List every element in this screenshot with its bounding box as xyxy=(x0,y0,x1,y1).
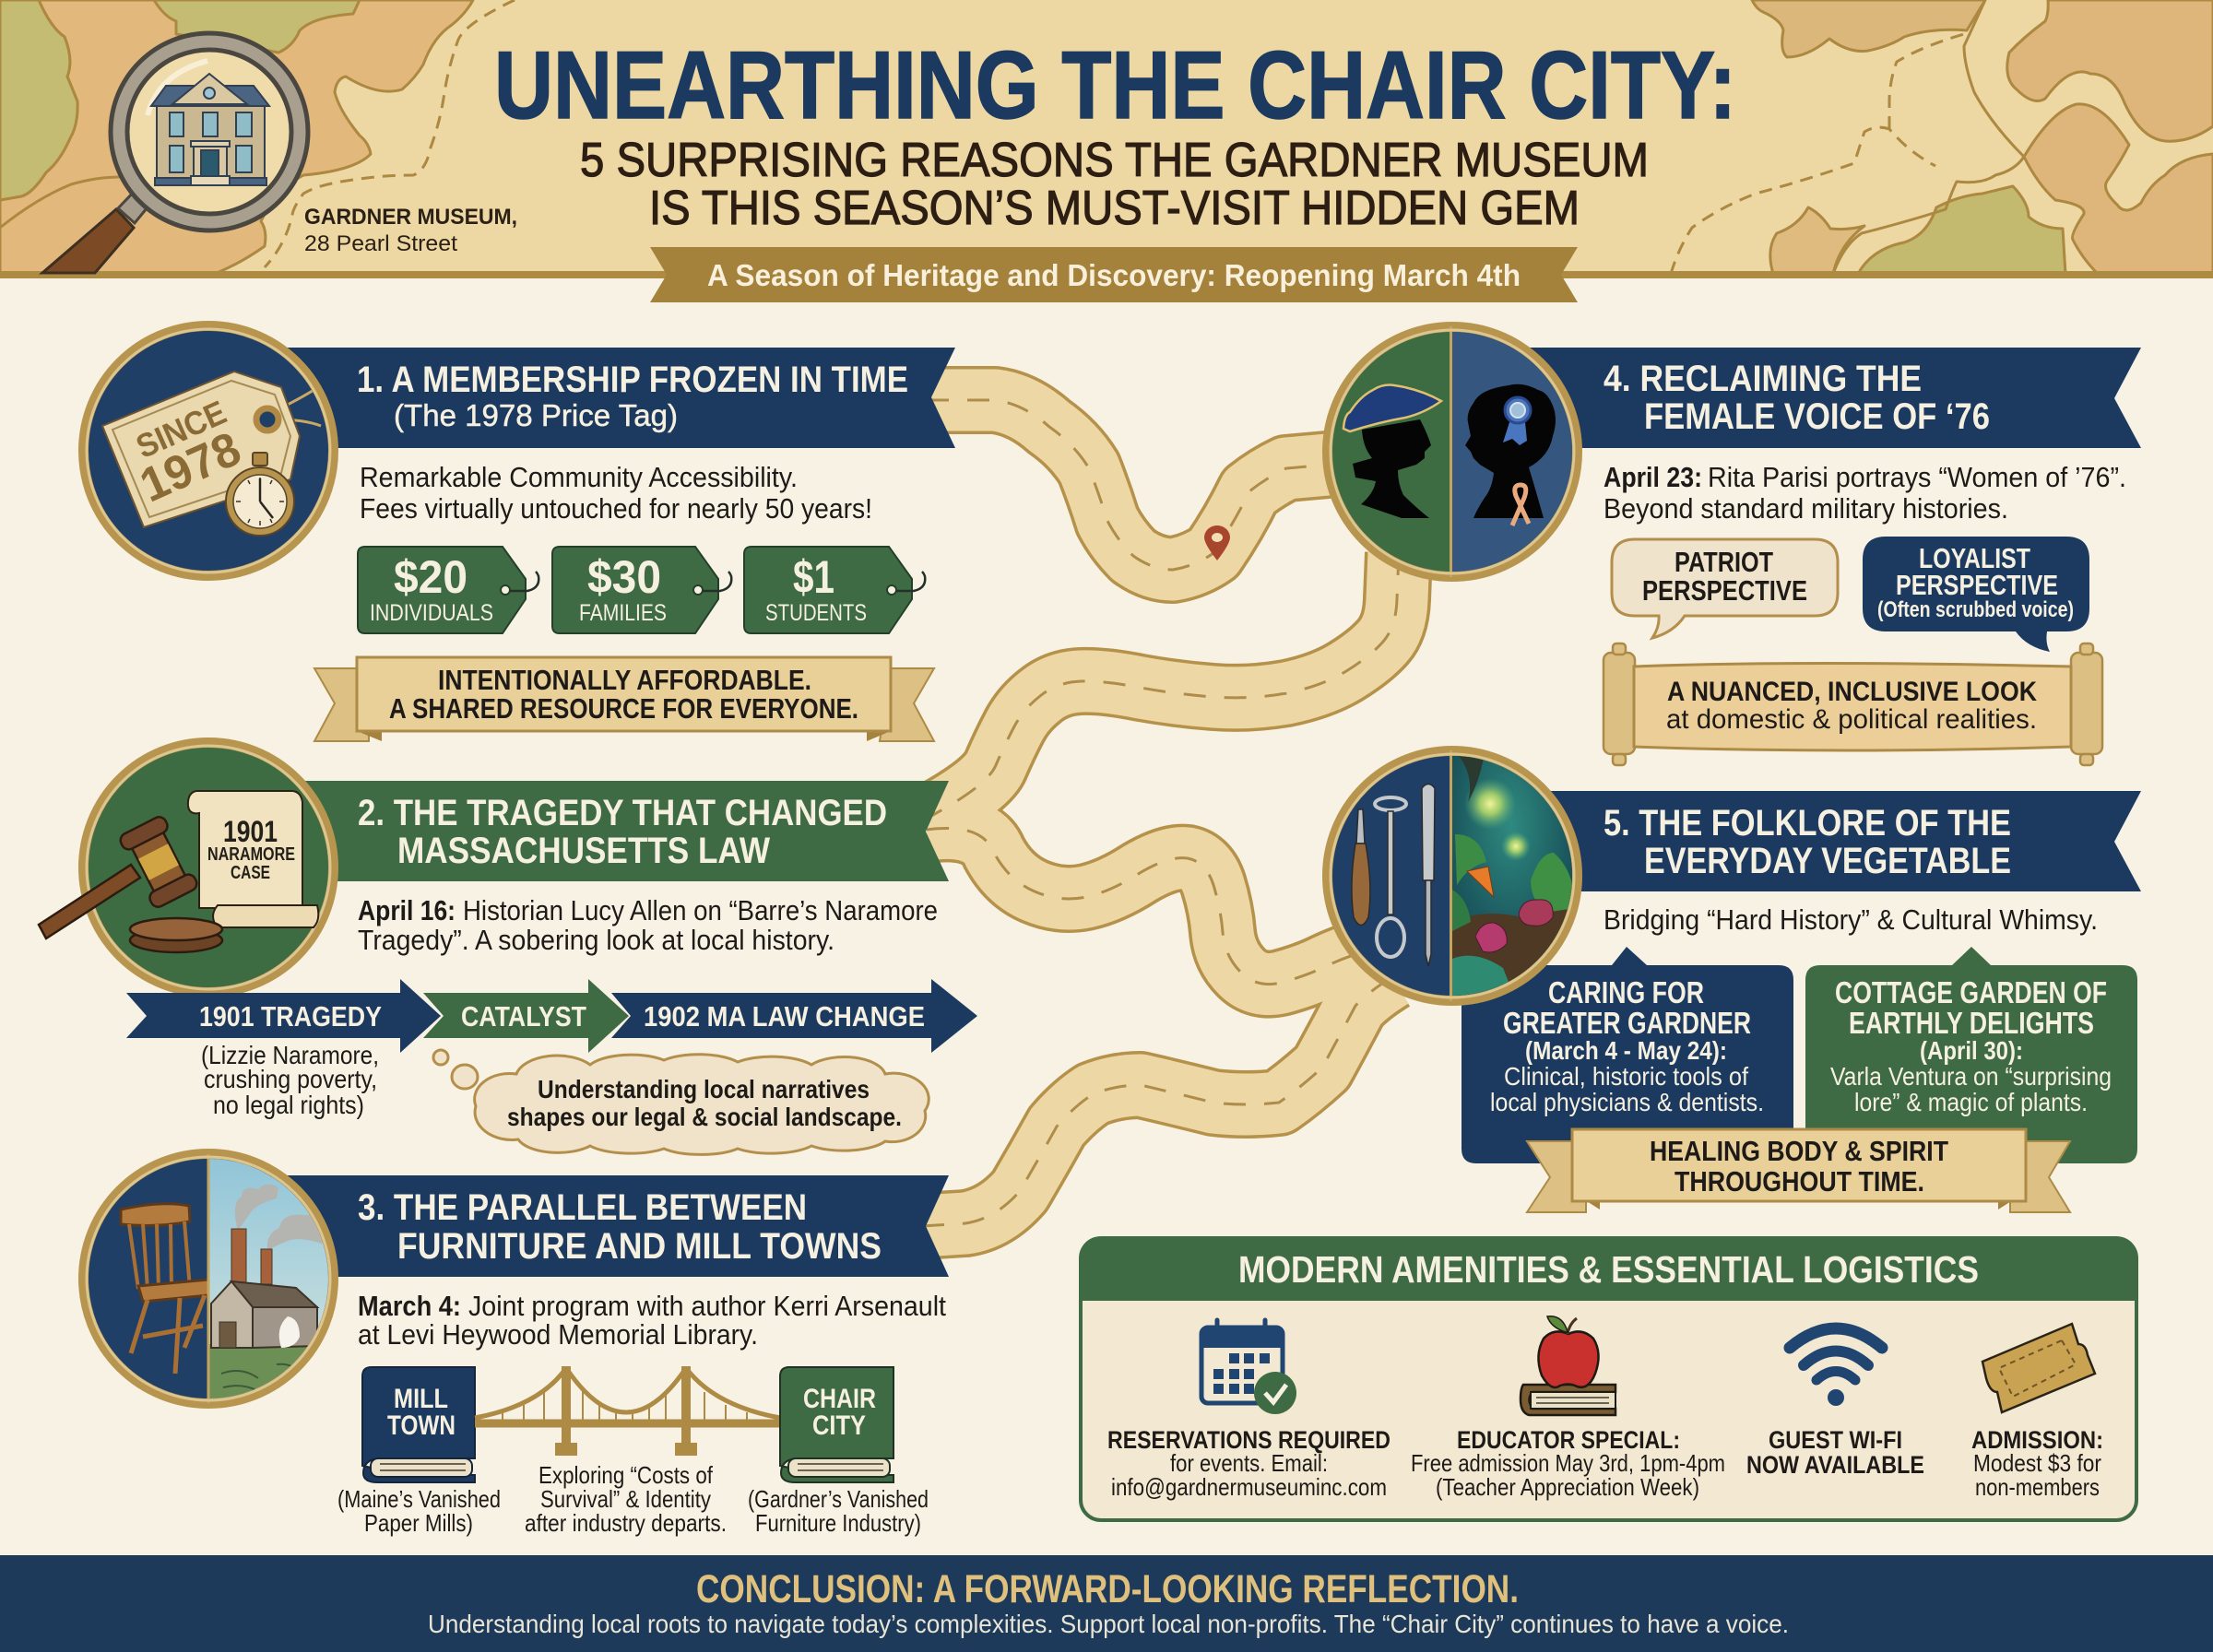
price tag: families xyxy=(552,547,731,633)
speech bubble: loyalist: LOYALIST xyxy=(1919,542,2030,574)
event text: April 23: xyxy=(1604,461,1702,493)
speech bubble: patriot: PERSPECTIVE xyxy=(1642,574,1807,607)
price tag: families: FAMILIES xyxy=(579,600,667,626)
heading banner 1: (The 1978 Price Tag) xyxy=(394,398,678,432)
factory xyxy=(235,1184,278,1231)
bridge captions: (Gardner’s Vanished xyxy=(748,1485,929,1513)
icon: wifi xyxy=(1790,1328,1882,1406)
panel: section 5 folklore xyxy=(1328,747,2141,1212)
bridge captions: Furniture Industry) xyxy=(755,1509,921,1537)
subtitle: 5 SURPRISING REASONS THE GARDNER MUSEUM xyxy=(580,134,1649,187)
bridge captions: after industry departs. xyxy=(525,1509,727,1537)
medallion: chair and mill xyxy=(83,1152,337,1410)
wifi text xyxy=(1746,1426,1924,1479)
educator text: EDUCATOR SPECIAL: xyxy=(1457,1426,1680,1454)
event text: March 4: xyxy=(358,1290,461,1322)
amenities header: MODERN AMENITIES & ESSENTIAL LOGISTICS xyxy=(1238,1248,1979,1291)
price tag: individuals xyxy=(358,547,538,633)
bridge captions: Paper Mills) xyxy=(364,1509,473,1537)
price tag: students: $1 xyxy=(793,551,834,603)
icon: ticket xyxy=(1982,1324,2095,1412)
icon: book mill town xyxy=(362,1367,475,1482)
subtitle xyxy=(580,134,1649,235)
heading banner 2: 2. THE TRAGEDY THAT CHANGED xyxy=(358,793,887,833)
ribbon banner: healing body and spirit: HEALING BODY & SPIRIT xyxy=(1650,1135,1948,1167)
ribbon banner: healing body and spirit xyxy=(1527,1129,2070,1212)
scroll: nuanced look: at domestic & political realities. xyxy=(1666,704,2037,735)
medallion: medical tools and garden xyxy=(1328,747,1584,1005)
event text: Historian Lucy Allen on “Barre’s Naramore xyxy=(463,894,938,926)
price tag: individuals: INDIVIDUALS xyxy=(370,600,493,626)
intro text: Bridging “Hard History” & Cultural Whimsy. xyxy=(1604,903,2098,936)
educator text: (Teacher Appreciation Week) xyxy=(1436,1473,1699,1501)
ribbon banner: intentionally affordable xyxy=(314,657,934,741)
heading banner 4: FEMALE VOICE OF ‘76 xyxy=(1644,396,1990,437)
card: caring for greater gardner: Clinical, historic tools of xyxy=(1504,1062,1748,1091)
card: cottage garden: Varla Ventura on “surprising xyxy=(1830,1062,2112,1091)
card: cottage garden: lore” & magic of plants. xyxy=(1854,1088,2088,1116)
event text: Beyond standard military histories. xyxy=(1604,492,2008,525)
wifi text: GUEST WI-FI xyxy=(1769,1426,1902,1454)
thought bubble: shapes our legal & social landscape. xyxy=(507,1103,902,1131)
medallion: gavel and scroll xyxy=(39,743,334,992)
event text: Rita Parisi portrays “Women of ’76”. xyxy=(1708,461,2126,493)
price tag: individuals: $20 xyxy=(394,551,467,603)
heading banner 5: EVERYDAY VEGETABLE xyxy=(1644,841,2011,881)
speech bubble: loyalist: PERSPECTIVE xyxy=(1896,569,2058,601)
heading banner 2: MASSACHUSETTS LAW xyxy=(397,831,770,871)
heading banner 1: 1. A MEMBERSHIP FROZEN IN TIME xyxy=(357,360,908,400)
medallion: patriot and loyalist silhouettes xyxy=(1328,323,1584,581)
arrow: catalyst xyxy=(423,979,629,1053)
arrow: 1901 tragedy: 1901 TRAGEDY xyxy=(199,1000,382,1032)
icon: magnifying glass with museum xyxy=(42,33,308,273)
event text xyxy=(1604,461,2126,525)
bridge captions: (Maine’s Vanished xyxy=(337,1485,501,1513)
heading banner 2 xyxy=(277,781,949,881)
patriot silhouette xyxy=(1353,419,1431,518)
admission text: Modest $3 for xyxy=(1973,1449,2101,1477)
panel: section 1 membership xyxy=(83,326,955,741)
heading banner 4 xyxy=(1512,348,2141,448)
intro text: Fees virtually untouched for nearly 50 years! xyxy=(360,492,872,525)
admission text: non-members xyxy=(1975,1473,2100,1501)
bridge captions: Exploring “Costs of xyxy=(538,1461,714,1489)
admission text xyxy=(1971,1426,2103,1501)
icon: book chair city xyxy=(780,1367,893,1482)
event text: April 16: xyxy=(358,894,456,926)
event text xyxy=(358,894,938,956)
reservations text: for events. Email: xyxy=(1170,1449,1328,1477)
heading banner 4: 4. RECLAIMING THE xyxy=(1604,359,1922,399)
card: caring for greater gardner: local physicians & dentists. xyxy=(1490,1088,1764,1116)
intro text: Remarkable Community Accessibility. xyxy=(360,461,798,493)
icon: book chair city: CHAIR xyxy=(803,1384,876,1414)
panel: section 3 parallel xyxy=(83,1152,949,1537)
card: caring for greater gardner: GREATER GARDNER xyxy=(1503,1006,1751,1040)
magnifier handle xyxy=(42,209,134,273)
museum name and address: GARDNER MUSEUM, xyxy=(304,205,517,230)
museum name and address xyxy=(304,205,517,256)
scroll xyxy=(188,791,318,927)
reservations text xyxy=(1107,1426,1391,1501)
icon: book chair city: CITY xyxy=(812,1410,866,1441)
winding road connecting sections xyxy=(922,400,1399,1226)
arrow caption: (Lizzie Naramore, xyxy=(201,1041,379,1069)
icon: map pin xyxy=(1204,525,1230,560)
arrow caption xyxy=(201,1041,379,1119)
awareness ribbon xyxy=(1512,485,1529,525)
header ribbon xyxy=(650,247,1578,302)
heading banner 5 xyxy=(1512,791,2141,891)
educator text xyxy=(1411,1426,1725,1501)
bridge captions xyxy=(337,1461,929,1537)
card: cottage garden: (April 30): xyxy=(1920,1036,2023,1065)
medallion: gavel and scroll: 1901 xyxy=(223,815,278,848)
scroll: nuanced look: A NUANCED, INCLUSIVE LOOK xyxy=(1667,677,2037,707)
price tag: students xyxy=(744,547,925,633)
medallion: gavel and scroll: NARAMORE xyxy=(207,844,295,865)
ribbon banner: intentionally affordable: INTENTIONALLY AFFORDABLE. xyxy=(438,664,811,696)
wifi text: NOW AVAILABLE xyxy=(1746,1451,1924,1479)
footer conclusion: CONCLUSION: A FORWARD-LOOKING REFLECTION. xyxy=(696,1567,1519,1611)
title: UNEARTHING THE CHAIR CITY: xyxy=(494,32,1736,139)
amenities header xyxy=(1081,1237,2136,1301)
price tag: families: $30 xyxy=(587,551,661,603)
header ribbon: A Season of Heritage and Discovery: Reopening March 4th xyxy=(707,258,1521,292)
event text: Joint program with author Kerri Arsenault xyxy=(468,1290,946,1322)
price tag: students: STUDENTS xyxy=(765,600,867,626)
intro text xyxy=(360,461,872,525)
ribbon banner: intentionally affordable: A SHARED RESOURCE FOR EVERYONE. xyxy=(389,692,858,725)
arrow: catalyst: CATALYST xyxy=(461,1000,586,1032)
museum name and address: 28 Pearl Street xyxy=(304,231,457,256)
icon: suspension bridge xyxy=(475,1366,780,1455)
thought bubble xyxy=(433,1050,929,1154)
card: cottage garden xyxy=(1805,947,2137,1163)
medallion: 1978 tag and pocket watch: SINCE xyxy=(130,393,231,466)
medallion: gavel and scroll: CASE xyxy=(231,863,270,883)
speech bubble: loyalist: (Often scrubbed voice) xyxy=(1877,597,2074,622)
card: cottage garden: COTTAGE GARDEN OF xyxy=(1835,975,2107,1009)
heading banner 3 xyxy=(277,1175,949,1277)
footer conclusion xyxy=(0,1555,2213,1652)
subtitle: IS THIS SEASON’S MUST-VISIT HIDDEN GEM xyxy=(649,182,1580,235)
museum building xyxy=(151,74,269,185)
icon: calendar xyxy=(1201,1320,1296,1414)
arrow caption: crushing poverty, xyxy=(204,1065,377,1093)
event text: Tragedy”. A sobering look at local history. xyxy=(358,924,834,956)
arrow: 1901 tragedy xyxy=(126,979,441,1053)
event text: at Levi Heywood Memorial Library. xyxy=(358,1318,758,1351)
arrow: 1902 law change xyxy=(611,979,977,1053)
heading banner 3: 3. THE PARALLEL BETWEEN xyxy=(358,1187,807,1228)
reservations text: info@gardnermuseuminc.com xyxy=(1111,1473,1387,1501)
chair xyxy=(121,1204,208,1374)
pocket watch xyxy=(226,453,294,536)
bridge captions: Survival” & Identity xyxy=(540,1485,711,1513)
panel: section 2 tragedy xyxy=(39,743,977,1154)
panel: section 4 female voice xyxy=(1328,323,2141,765)
panel: amenities and logistics xyxy=(1081,1237,2136,1520)
medallion: 1978 tag and pocket watch: 1978 xyxy=(133,422,249,513)
reservations text: RESERVATIONS REQUIRED xyxy=(1107,1426,1391,1454)
gavel xyxy=(39,815,222,952)
event text xyxy=(358,1290,946,1351)
card: caring for greater gardner: CARING FOR xyxy=(1548,975,1704,1009)
card: caring for greater gardner xyxy=(1462,947,1793,1163)
thought bubble: Understanding local narratives xyxy=(538,1075,870,1103)
heading banner 3: FURNITURE AND MILL TOWNS xyxy=(397,1226,882,1267)
admission text: ADMISSION: xyxy=(1971,1426,2103,1454)
icon: apple on book xyxy=(1521,1316,1615,1415)
heading banner 1 xyxy=(277,348,955,448)
speech bubble: patriot: PATRIOT xyxy=(1675,546,1773,578)
card: caring for greater gardner: (March 4 - May 24): xyxy=(1525,1036,1727,1065)
card: cottage garden: EARTHLY DELIGHTS xyxy=(1849,1006,2094,1040)
arrow caption: no legal rights) xyxy=(213,1091,364,1119)
loyalist silhouette xyxy=(1465,384,1556,518)
footer conclusion: Understanding local roots to navigate today’s complexities. Support local non-profits. The “Chair City” continues to have a voice. xyxy=(428,1610,1789,1638)
medical tools xyxy=(1352,784,1435,966)
icon: book mill town: MILL xyxy=(394,1384,448,1414)
educator text: Free admission May 3rd, 1pm-4pm xyxy=(1411,1449,1725,1477)
heading banner 5: 5. THE FOLKLORE OF THE xyxy=(1604,803,2011,844)
ribbon banner: healing body and spirit: THROUGHOUT TIME. xyxy=(1675,1165,1924,1198)
icon: book mill town: TOWN xyxy=(387,1410,456,1441)
arrow: 1902 law change: 1902 MA LAW CHANGE xyxy=(644,1000,925,1032)
header map band xyxy=(0,0,2213,278)
medallion: 1978 tag and pocket watch xyxy=(83,326,334,575)
speech bubble: patriot xyxy=(1612,539,1838,638)
speech bubble: loyalist xyxy=(1863,537,2089,652)
scroll: nuanced look xyxy=(1604,643,2102,765)
